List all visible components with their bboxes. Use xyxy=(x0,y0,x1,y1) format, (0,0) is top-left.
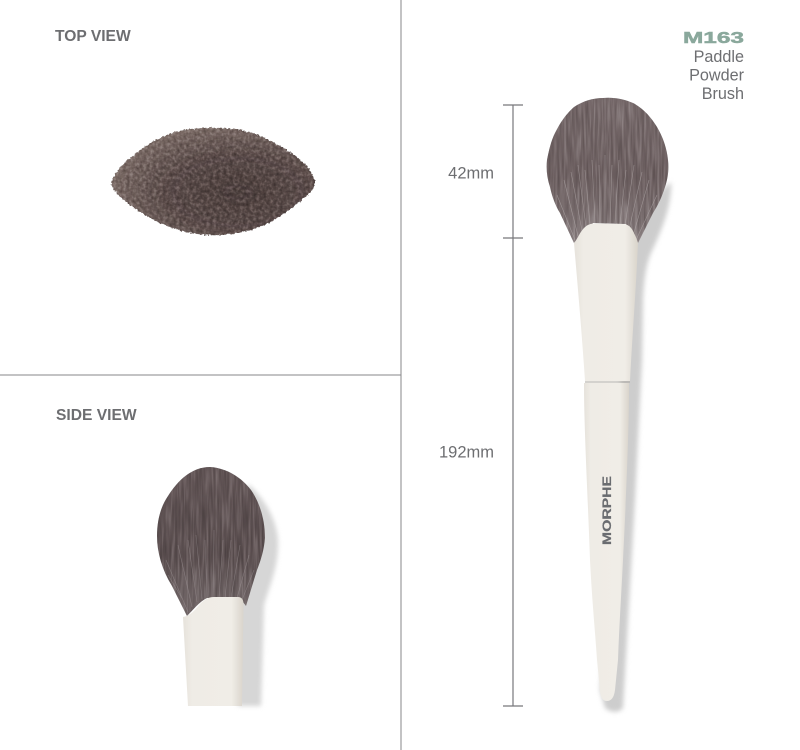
product name line 3: Brush xyxy=(702,85,744,103)
heading: top view: TOP VIEW xyxy=(55,28,131,45)
main brush xyxy=(547,98,671,712)
heading: side view: SIDE VIEW xyxy=(56,407,137,424)
product code: M163 xyxy=(683,30,744,47)
main brush shadow xyxy=(600,182,671,712)
side view bristles xyxy=(157,467,265,616)
panel dividers xyxy=(0,0,401,750)
label: head length: 42mm xyxy=(448,164,494,182)
label: total length: 192mm xyxy=(439,444,494,462)
product name line 2: Powder xyxy=(689,66,745,84)
product name line 1: Paddle xyxy=(694,48,744,66)
measurement ruler xyxy=(503,105,523,706)
main brush bristles xyxy=(547,98,668,243)
main brush ferrule xyxy=(574,224,638,381)
side view shadow xyxy=(238,484,278,706)
side view handle xyxy=(183,597,244,706)
brand name on handle: MORPHE xyxy=(602,476,614,545)
top view brush head xyxy=(111,128,315,235)
side view brush xyxy=(157,467,278,706)
main brush handle xyxy=(584,383,629,701)
product title xyxy=(683,30,745,103)
